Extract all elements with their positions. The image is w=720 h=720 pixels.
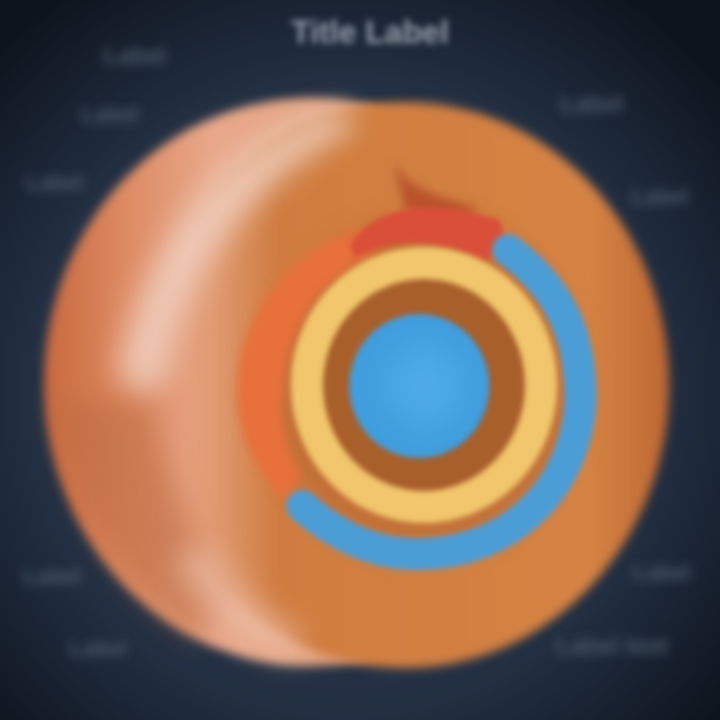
notch at top (393, 160, 480, 225)
face rim shade (265, 220, 585, 550)
side labels (23, 43, 691, 661)
wheel face (141, 102, 669, 668)
side labels: Label (26, 170, 84, 195)
side labels: Label (631, 184, 689, 209)
lower pale band (175, 545, 300, 658)
ring hollow (319, 275, 529, 495)
side labels: Label (633, 560, 691, 585)
side labels: Label (104, 43, 166, 70)
side labels: Label (561, 91, 623, 118)
side labels: Label text (556, 633, 668, 660)
cylinder side (44, 98, 576, 666)
blue centre (349, 314, 489, 458)
blue centre highlight (387, 345, 463, 425)
yellow ring (307, 263, 541, 507)
blue arc (302, 250, 580, 554)
side labels: Label (81, 102, 139, 127)
red arc (350, 208, 505, 262)
orange arc (237, 228, 375, 500)
side labels: Label (23, 564, 81, 589)
side labels: Label (69, 636, 127, 661)
title: Title Label (291, 14, 449, 50)
lower left shadow (55, 400, 235, 640)
pale highlight band (118, 108, 355, 391)
wheel (44, 98, 669, 668)
